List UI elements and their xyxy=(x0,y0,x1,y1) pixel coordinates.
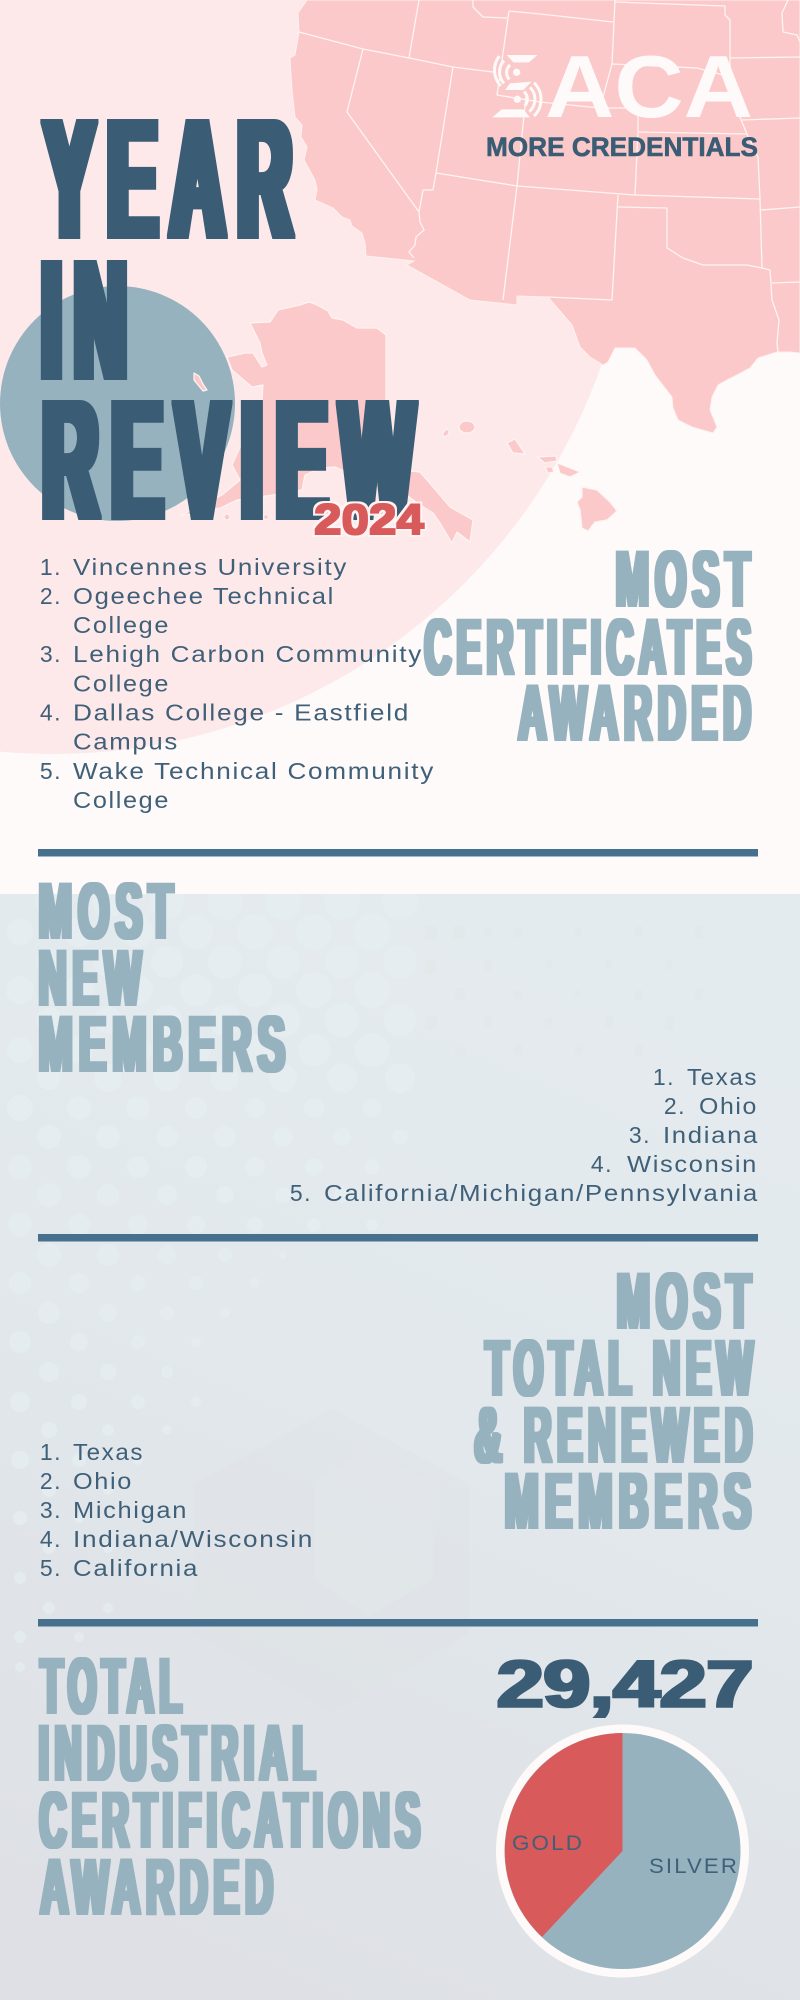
map: continental United States with state lines xyxy=(290,0,800,433)
list: most total new and renewed members: Ohio xyxy=(73,1468,133,1494)
list: most certificates awarded: 4. xyxy=(40,700,62,726)
list: most new members: Wisconsin xyxy=(627,1151,758,1177)
list: most new members: Indiana xyxy=(663,1122,759,1148)
list: most certificates awarded: Campus xyxy=(73,728,179,754)
list: most new members: Texas xyxy=(687,1064,758,1090)
logo: SACA with signal S icon xyxy=(492,37,753,136)
heading: total industrial certifications awarded: AWARDED xyxy=(40,1843,279,1931)
title: YEAR xyxy=(44,84,305,273)
heading: total industrial certifications awarded xyxy=(39,1642,426,1931)
heading: total industrial certifications awarded: TOTAL xyxy=(40,1642,187,1730)
list: most certificates awarded: Vincennes University xyxy=(73,554,348,580)
list: most certificates awarded: College xyxy=(73,670,170,696)
list: most new members: 5. xyxy=(290,1180,312,1206)
list: most total new and renewed members: 4. xyxy=(40,1526,62,1552)
list: most new members xyxy=(290,1064,759,1206)
icon: signal S mark xyxy=(492,55,541,117)
list: most total new and renewed members xyxy=(40,1439,314,1581)
total figure: 29,427 xyxy=(497,1647,753,1722)
list: most certificates awarded: Wake Technical Community xyxy=(73,758,435,784)
list: most certificates awarded: 5. xyxy=(40,758,62,784)
heading: most certificates awarded xyxy=(424,535,757,757)
heading: most new members: NEW xyxy=(39,934,147,1022)
list: most total new and renewed members: Indiana/Wisconsin xyxy=(73,1526,314,1552)
list: most certificates awarded: College xyxy=(73,612,170,638)
divider xyxy=(38,1619,758,1626)
list: most certificates awarded: College xyxy=(73,787,170,813)
pie label: silver: SILVER xyxy=(649,1855,739,1878)
list: most total new and renewed members: Michigan xyxy=(73,1497,188,1523)
list: most total new and renewed members: 1. xyxy=(40,1439,62,1465)
list: most certificates awarded: 2. xyxy=(40,583,62,609)
tagline: MORE CREDENTIALS xyxy=(486,132,758,162)
decorative teal circle xyxy=(0,286,235,521)
map: Alaska and Hawaii insets xyxy=(180,302,617,543)
list: most new members: Ohio xyxy=(699,1093,758,1119)
list: most new members: 2. xyxy=(664,1093,686,1119)
list: most new members: California/Michigan/Pennsylvania xyxy=(324,1180,759,1206)
list: most new members: 1. xyxy=(653,1064,675,1090)
list: most certificates awarded: 1. xyxy=(40,554,62,580)
list: most new members: 4. xyxy=(591,1151,613,1177)
pie label: gold: GOLD xyxy=(512,1832,584,1855)
year 2024: 2024 xyxy=(314,496,424,544)
title: IN xyxy=(42,225,139,414)
list: most total new and renewed members: 2. xyxy=(40,1468,62,1494)
list: most new members: 3. xyxy=(629,1122,651,1148)
heading: most new members xyxy=(39,867,291,1088)
heading: most total new and renewed members xyxy=(474,1257,759,1545)
list: most certificates awarded xyxy=(40,554,435,813)
heading: most new members: MOST xyxy=(39,867,179,955)
list: most total new and renewed members: 3. xyxy=(40,1497,62,1523)
list: most certificates awarded: Dallas College - Eastfield xyxy=(73,700,410,726)
list: most total new and renewed members: 5. xyxy=(40,1555,62,1581)
list: most certificates awarded: Ogeechee Technical xyxy=(73,583,335,609)
title xyxy=(42,84,427,554)
heading: most new members: MEMBERS xyxy=(39,1000,291,1088)
list: most total new and renewed members: Texas xyxy=(73,1439,144,1465)
list: most certificates awarded: 3. xyxy=(40,641,62,667)
logo wordmark: ACA xyxy=(545,37,753,136)
pie chart: gold and silver certifications xyxy=(496,1724,749,1978)
list: most certificates awarded: Lehigh Carbon Community xyxy=(73,641,423,667)
heading: total industrial certifications awarded: INDUSTRIAL xyxy=(39,1709,321,1797)
divider xyxy=(38,849,758,856)
divider xyxy=(38,1234,758,1242)
list: most total new and renewed members: California xyxy=(73,1555,199,1581)
